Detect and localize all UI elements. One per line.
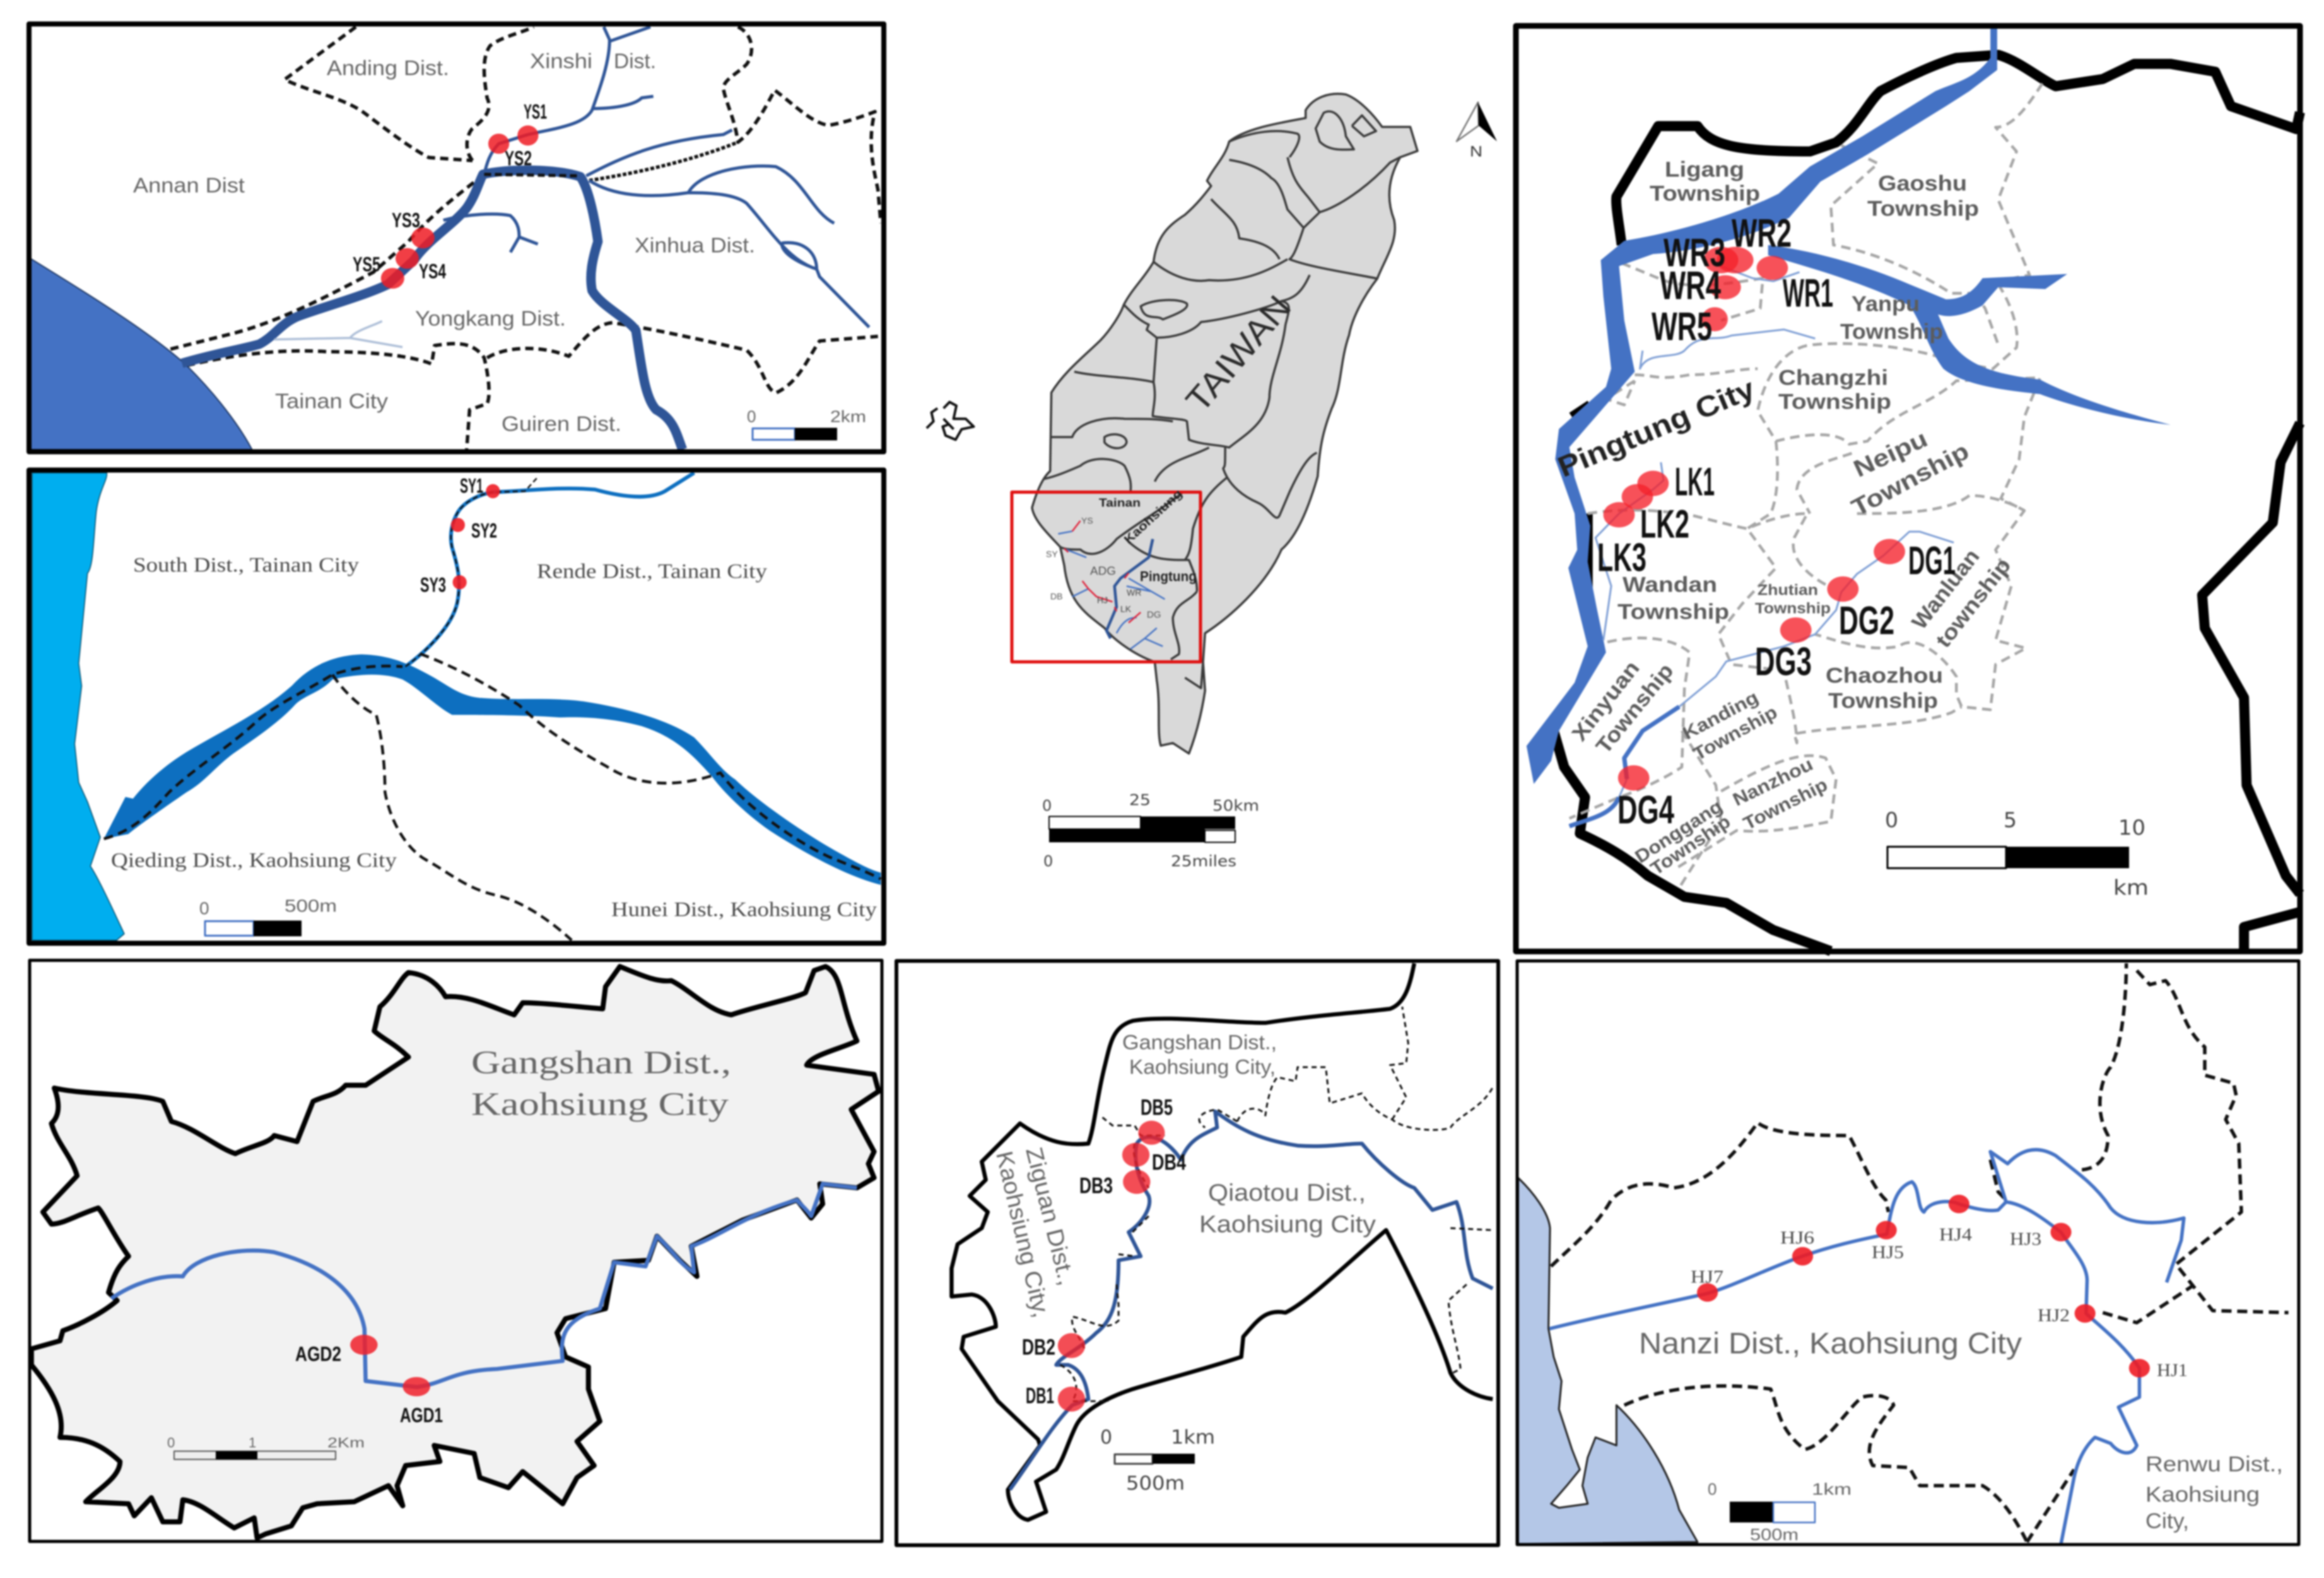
east river branch xyxy=(1768,245,2171,425)
sea area xyxy=(1518,1178,1698,1544)
site labels AGD xyxy=(295,1343,443,1427)
site labels DB: DB3 xyxy=(1079,1174,1113,1198)
township labels: Township xyxy=(1828,689,1938,713)
scale bar km and miles xyxy=(1042,791,1259,870)
site labels YS: YS2 xyxy=(505,147,532,170)
main river xyxy=(1527,25,1997,784)
site labels DB: DB1 xyxy=(1026,1384,1054,1408)
sampling sites DB xyxy=(1058,1121,1165,1411)
scale bar 500 m xyxy=(199,896,337,936)
site labels WR LK DG: DG1 xyxy=(1908,539,1956,583)
district labels: City, xyxy=(2145,1509,2189,1533)
scale bar 500 m: 500m xyxy=(285,896,337,916)
district boundaries xyxy=(1060,1007,1493,1401)
township labels: Township xyxy=(1650,182,1760,206)
township labels: Township xyxy=(1778,390,1891,414)
river xyxy=(1549,1150,2184,1544)
district labels: Gangshan Dist., xyxy=(1122,1031,1277,1054)
district labels: Dist. xyxy=(614,49,656,73)
township labels: Township xyxy=(1840,320,1943,344)
Taiwan island outline xyxy=(1032,94,1417,753)
icon: north arrow xyxy=(1457,102,1497,160)
township labels: Township xyxy=(1867,197,1979,221)
site labels YS: YS4 xyxy=(419,260,446,283)
district labels: Hunei Dist., Kaohsiung City xyxy=(611,898,877,921)
scale bar 10 km: km xyxy=(2113,875,2149,900)
site labels HJ: HJ2 xyxy=(2038,1305,2070,1326)
site labels AGD: AGD1 xyxy=(400,1404,443,1427)
township labels: township xyxy=(1931,553,2016,652)
river xyxy=(1010,1111,1493,1490)
district labels: Rende Dist., Tainan City xyxy=(537,560,768,583)
scale bar 2 Km: 0 xyxy=(167,1435,175,1451)
sea area xyxy=(30,259,252,450)
site labels WR LK DG: WR5 xyxy=(1652,305,1712,349)
district labels xyxy=(991,1031,1376,1320)
site labels WR LK DG: LK1 xyxy=(1675,460,1715,504)
mini map labels xyxy=(1046,487,1197,620)
scale bar 10 km: 5 xyxy=(2004,808,2017,832)
mini map labels: DB xyxy=(1050,591,1062,601)
scale bar 10 km xyxy=(1885,808,2149,900)
scale bar 2 Km: 2Km xyxy=(327,1435,365,1451)
township labels: Kanding xyxy=(1679,687,1762,744)
township labels: Ligang xyxy=(1665,158,1744,182)
site labels WR LK DG: DG2 xyxy=(1839,599,1894,643)
scale bar 1 km: 500m xyxy=(1750,1525,1799,1544)
district labels: Tainan City xyxy=(275,389,389,413)
site labels HJ: HJ4 xyxy=(1939,1225,1973,1245)
county boundaries xyxy=(1044,112,1400,688)
district labels xyxy=(1639,1326,2283,1533)
site labels WR LK DG: WR2 xyxy=(1732,211,1792,256)
mini map labels: ADG xyxy=(1090,565,1116,577)
sampling sites AGD xyxy=(350,1334,430,1396)
sampling sites WR LK DG xyxy=(1604,247,1905,791)
site labels WR LK DG: WR4 xyxy=(1660,264,1721,308)
site labels YS: YS3 xyxy=(392,209,420,232)
scale bar 2 Km xyxy=(167,1435,365,1459)
sampling sites SY1-SY3 xyxy=(451,484,500,589)
panel: Yanshui river map xyxy=(29,24,884,452)
scale bar 10 km: 10 xyxy=(2118,815,2145,840)
scale bar 500 m: 0 xyxy=(199,898,209,918)
scale bar km and miles: 25miles xyxy=(1171,852,1236,870)
site labels WR LK DG: LK2 xyxy=(1640,502,1689,546)
township labels: Wandan xyxy=(1623,573,1717,597)
district labels: Anding Dist. xyxy=(327,56,449,79)
township labels: Neipu xyxy=(1850,426,1932,483)
mini map labels: Kaohsiung xyxy=(1122,487,1185,547)
district shape xyxy=(32,967,879,1538)
site labels HJ: HJ1 xyxy=(2157,1360,2188,1381)
site labels DB: DB4 xyxy=(1152,1150,1186,1175)
county outline xyxy=(1554,55,2300,951)
mini map labels: YS xyxy=(1081,515,1093,526)
site labels WR LK DG: WR1 xyxy=(1783,271,1833,315)
township labels: Township xyxy=(1592,659,1678,758)
site labels DB xyxy=(1022,1095,1186,1408)
scale bar 2 km xyxy=(747,407,866,440)
site labels YS: YS1 xyxy=(524,100,547,123)
mini map labels: LK xyxy=(1120,604,1132,614)
river xyxy=(112,1184,857,1387)
small tributaries xyxy=(1570,266,1954,826)
district labels: Xinhua Dist. xyxy=(635,233,755,257)
site labels DB: DB5 xyxy=(1141,1095,1173,1120)
district labels: Kaohsiung City, xyxy=(1129,1056,1276,1078)
site labels HJ: HJ5 xyxy=(1872,1242,1904,1263)
scale bar 10 km: 0 xyxy=(1885,808,1898,832)
scale bar km and miles: 50km xyxy=(1212,797,1259,815)
township labels: Chaozhou xyxy=(1826,664,1943,688)
scale bar 1 km xyxy=(1708,1480,1852,1544)
scale bar km and miles: 25 xyxy=(1129,791,1151,809)
district labels xyxy=(111,554,877,921)
scale bar 1 km xyxy=(1100,1427,1215,1495)
district labels: Kaohsiung City, xyxy=(991,1149,1055,1320)
mini map labels: WR xyxy=(1127,587,1141,598)
site labels WR LK DG: DG3 xyxy=(1755,640,1812,684)
district boundaries xyxy=(104,478,881,940)
mini map labels: Tainan xyxy=(1099,497,1141,509)
mini map labels: Pingtung xyxy=(1140,568,1197,584)
site labels WR LK DG: DG4 xyxy=(1617,788,1674,832)
site labels HJ: HJ3 xyxy=(2010,1229,2041,1249)
district labels: Ziguan Dist., xyxy=(1021,1145,1080,1288)
scale bar 1 km: 500m xyxy=(1126,1473,1185,1495)
sampling sites HJ xyxy=(1697,1195,2150,1377)
icon: Penghu islands xyxy=(927,402,974,440)
district labels: Yongkang Dist. xyxy=(415,307,566,330)
district label: Gangshan Dist., xyxy=(471,1045,731,1081)
township labels: Township xyxy=(1755,600,1831,617)
scale bar 2 Km: 1 xyxy=(249,1435,256,1451)
scale bar km and miles: 0 xyxy=(1043,852,1053,870)
township labels xyxy=(1553,158,2016,880)
township labels: Donggang xyxy=(1631,796,1726,868)
site labels SY: SY1 xyxy=(460,474,483,497)
township labels: Nanzhou xyxy=(1730,754,1816,810)
district labels xyxy=(133,49,755,435)
scale bar 1 km: 1km xyxy=(1171,1427,1215,1449)
scale bar 1 km: 0 xyxy=(1708,1480,1717,1499)
mini map labels: HJ xyxy=(1097,595,1108,605)
site labels SY xyxy=(420,474,497,596)
site labels WR LK DG: WR3 xyxy=(1664,231,1725,275)
township labels: Township xyxy=(1617,600,1729,624)
site labels YS xyxy=(353,100,547,283)
district boundaries xyxy=(167,27,881,450)
site labels SY: SY2 xyxy=(471,519,497,542)
district labels: Qiaotou Dist., xyxy=(1208,1180,1366,1206)
township labels: Township xyxy=(1848,438,1973,522)
township boundaries xyxy=(1570,79,2045,888)
site labels SY: SY3 xyxy=(420,574,446,596)
scale bar 1 km: 1km xyxy=(1812,1480,1852,1499)
township labels: Wanluan xyxy=(1907,545,1985,634)
site labels AGD: AGD2 xyxy=(295,1343,341,1365)
site labels WR LK DG: LK3 xyxy=(1597,536,1646,580)
district labels: Renwu Dist., xyxy=(2145,1452,2283,1476)
scale bar km and miles: 0 xyxy=(1042,797,1052,815)
district labels: Kaohsiung xyxy=(2145,1483,2260,1507)
icon: north arrow: N xyxy=(1470,143,1482,160)
district label: Kaohsiung City xyxy=(471,1086,729,1122)
township labels: Gaoshu xyxy=(1878,172,1967,196)
township labels: Xinyuan xyxy=(1567,656,1645,746)
site labels YS: YS5 xyxy=(353,253,380,276)
district labels: Xinshi xyxy=(530,49,592,73)
site labels HJ: HJ7 xyxy=(1691,1267,1723,1287)
mini map labels: DG xyxy=(1147,609,1161,620)
panel: Houjin river map xyxy=(1517,961,2299,1545)
township labels: Township xyxy=(1740,775,1831,834)
township labels: Zhutian xyxy=(1758,582,1818,599)
township labels: Pingtung City xyxy=(1553,372,1759,483)
panel: Agongdian river map xyxy=(30,960,882,1541)
district label xyxy=(471,1045,731,1122)
panel: Sanye river map xyxy=(29,470,884,943)
panel: Taiwan overview map xyxy=(927,94,1497,870)
river band xyxy=(104,654,881,885)
township labels: Yanpu xyxy=(1852,292,1920,316)
mini river map xyxy=(1058,521,1165,649)
district labels: South Dist., Tainan City xyxy=(133,554,360,577)
sampling sites YS1-YS5 xyxy=(381,126,538,289)
township labels: Township xyxy=(1647,811,1734,880)
district labels: Nanzi Dist., Kaohsiung City xyxy=(1639,1326,2022,1360)
site labels DB: DB2 xyxy=(1022,1335,1055,1360)
sea strip xyxy=(32,473,124,940)
study area box xyxy=(1012,492,1200,662)
island label: TAIWAN xyxy=(1179,288,1298,420)
district labels: Guiren Dist. xyxy=(502,412,621,435)
district outline xyxy=(951,963,1493,1520)
scale bar 2 km: 2km xyxy=(830,407,866,426)
district labels: Annan Dist xyxy=(133,174,245,197)
township labels: Township xyxy=(1690,702,1781,765)
site labels HJ: HJ6 xyxy=(1780,1228,1814,1248)
upstream channel xyxy=(406,473,694,667)
district labels: Qieding Dist., Kaohsiung City xyxy=(111,849,397,872)
scale bar 1 km: 0 xyxy=(1100,1427,1112,1449)
panel: Pingtung rivers map xyxy=(1516,25,2300,951)
panel: Dianbao river map xyxy=(896,961,1498,1545)
mini map labels: SY xyxy=(1046,549,1058,559)
township labels: Changzhi xyxy=(1778,366,1888,390)
site labels HJ xyxy=(1691,1225,2188,1381)
scale bar 2 km: 0 xyxy=(747,407,756,426)
site labels WR LK DG xyxy=(1597,211,1956,832)
district labels: Kaohsiung City xyxy=(1199,1211,1376,1238)
district boundaries xyxy=(1551,963,2289,1542)
river network xyxy=(182,27,869,450)
